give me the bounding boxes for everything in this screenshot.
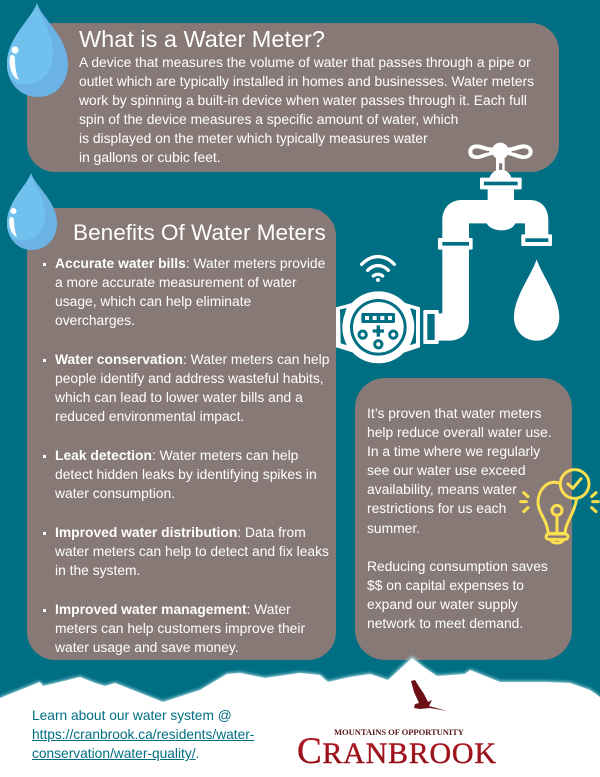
text block: benefits list bbox=[43, 255, 329, 655]
text block: water meter definition: outlet which are typically installed in homes and businesses. Water meters bbox=[79, 73, 534, 89]
text block: benefits list: reduced environmental impact. bbox=[55, 408, 244, 424]
text block: benefits list: Water conservation: Water meters can help bbox=[55, 350, 329, 366]
heading: what is a water meter: What is a Water Meter? bbox=[79, 26, 325, 52]
text block: water use callout: It’s proven that water meters bbox=[367, 405, 541, 421]
cranbrook logo text: MOUNTAINS OF OPPORTUNITY bbox=[334, 727, 465, 737]
heading: benefits of water meters: Benefits Of Water Meters bbox=[73, 220, 326, 245]
text block: water meter definition: is displayed on the meter which typically measures water bbox=[79, 130, 428, 146]
text block: water meter definition: work by spinning a built-in device when water passes through it. Each full bbox=[79, 92, 527, 108]
pipe collars bbox=[423, 178, 552, 344]
text block: learn about water system: conservation/water-quality/. bbox=[32, 746, 199, 761]
text block: water meter definition: in gallons or cubic feet. bbox=[79, 149, 221, 165]
text block: learn about water system bbox=[32, 708, 254, 761]
icon: water drop benefits bbox=[7, 173, 57, 250]
text block: benefits list: detect hidden leaks by identifying spikes in bbox=[55, 466, 317, 482]
text block: water use callout: Reducing consumption saves bbox=[367, 558, 548, 574]
text block: benefits list: meters can help customers improve their bbox=[55, 620, 305, 636]
falling drop bbox=[514, 259, 559, 341]
text block: water use callout: $$ on capital expenses to bbox=[367, 577, 524, 593]
text block: water use callout: availability, means water bbox=[367, 481, 517, 497]
text block: benefits list: overcharges. bbox=[55, 312, 135, 328]
text block: water meter definition bbox=[79, 54, 534, 165]
text block: benefits list: water consumption. bbox=[55, 485, 175, 501]
text block: water use callout: help reduce overall water use. bbox=[367, 424, 552, 440]
text block: benefits list: Improved water management: Water bbox=[55, 600, 291, 616]
panel: benefits of water meters bbox=[27, 208, 336, 660]
panel: water use callout bbox=[355, 378, 572, 660]
text block: water use callout: see our water use exceed bbox=[367, 462, 526, 478]
text block: benefits list: Leak detection: Water meters can help bbox=[55, 446, 298, 462]
meter bbox=[336, 291, 420, 363]
text block: water use callout: expand our water supply bbox=[367, 596, 518, 612]
cranbrook logo text: CRANBROOK bbox=[297, 731, 496, 772]
text block: water use callout: In a time where we regularly bbox=[367, 443, 540, 459]
text block: benefits list: a more accurate measurement of water bbox=[55, 274, 297, 290]
text block: water use callout: network to meet demand. bbox=[367, 615, 523, 631]
text block: benefits list: Accurate water bills: Water meters provide bbox=[55, 255, 325, 271]
text block: benefits list: usage, which can help eliminate bbox=[55, 293, 251, 309]
text block: water use callout: summer. bbox=[367, 520, 420, 536]
text block: water meter definition: spin of the device measures a specific amount of water, which bbox=[79, 111, 458, 127]
text block: benefits list: water usage and save money. bbox=[55, 639, 239, 655]
text block: water meter definition: A device that measures the volume of water that passes through a pipe or bbox=[79, 54, 531, 70]
text block: water use callout: restrictions for us each bbox=[367, 500, 506, 516]
wifi dot bbox=[376, 278, 380, 282]
text block: benefits list: Improved water distribution: Data from bbox=[55, 524, 306, 540]
text block: learn about water system: Learn about our water system @ bbox=[32, 708, 232, 723]
icon: water drop top bbox=[6, 3, 68, 97]
text block: water use callout bbox=[367, 405, 552, 631]
text block: benefits list: which can lead to lower water bills and a bbox=[55, 389, 303, 405]
faucet body pipe bbox=[437, 189, 548, 341]
text block: learn about water system: https://cranbrook.ca/residents/water- bbox=[32, 727, 254, 742]
text block: benefits list: people identify and address wasteful habits, bbox=[55, 370, 324, 386]
faucet handle bbox=[468, 143, 533, 178]
panel: what is a water meter bbox=[27, 23, 559, 172]
wifi symbol bbox=[362, 257, 394, 276]
text block: benefits list: water meters can help to detect and fix leaks bbox=[55, 543, 329, 559]
text block: benefits list: in the system. bbox=[55, 562, 140, 578]
